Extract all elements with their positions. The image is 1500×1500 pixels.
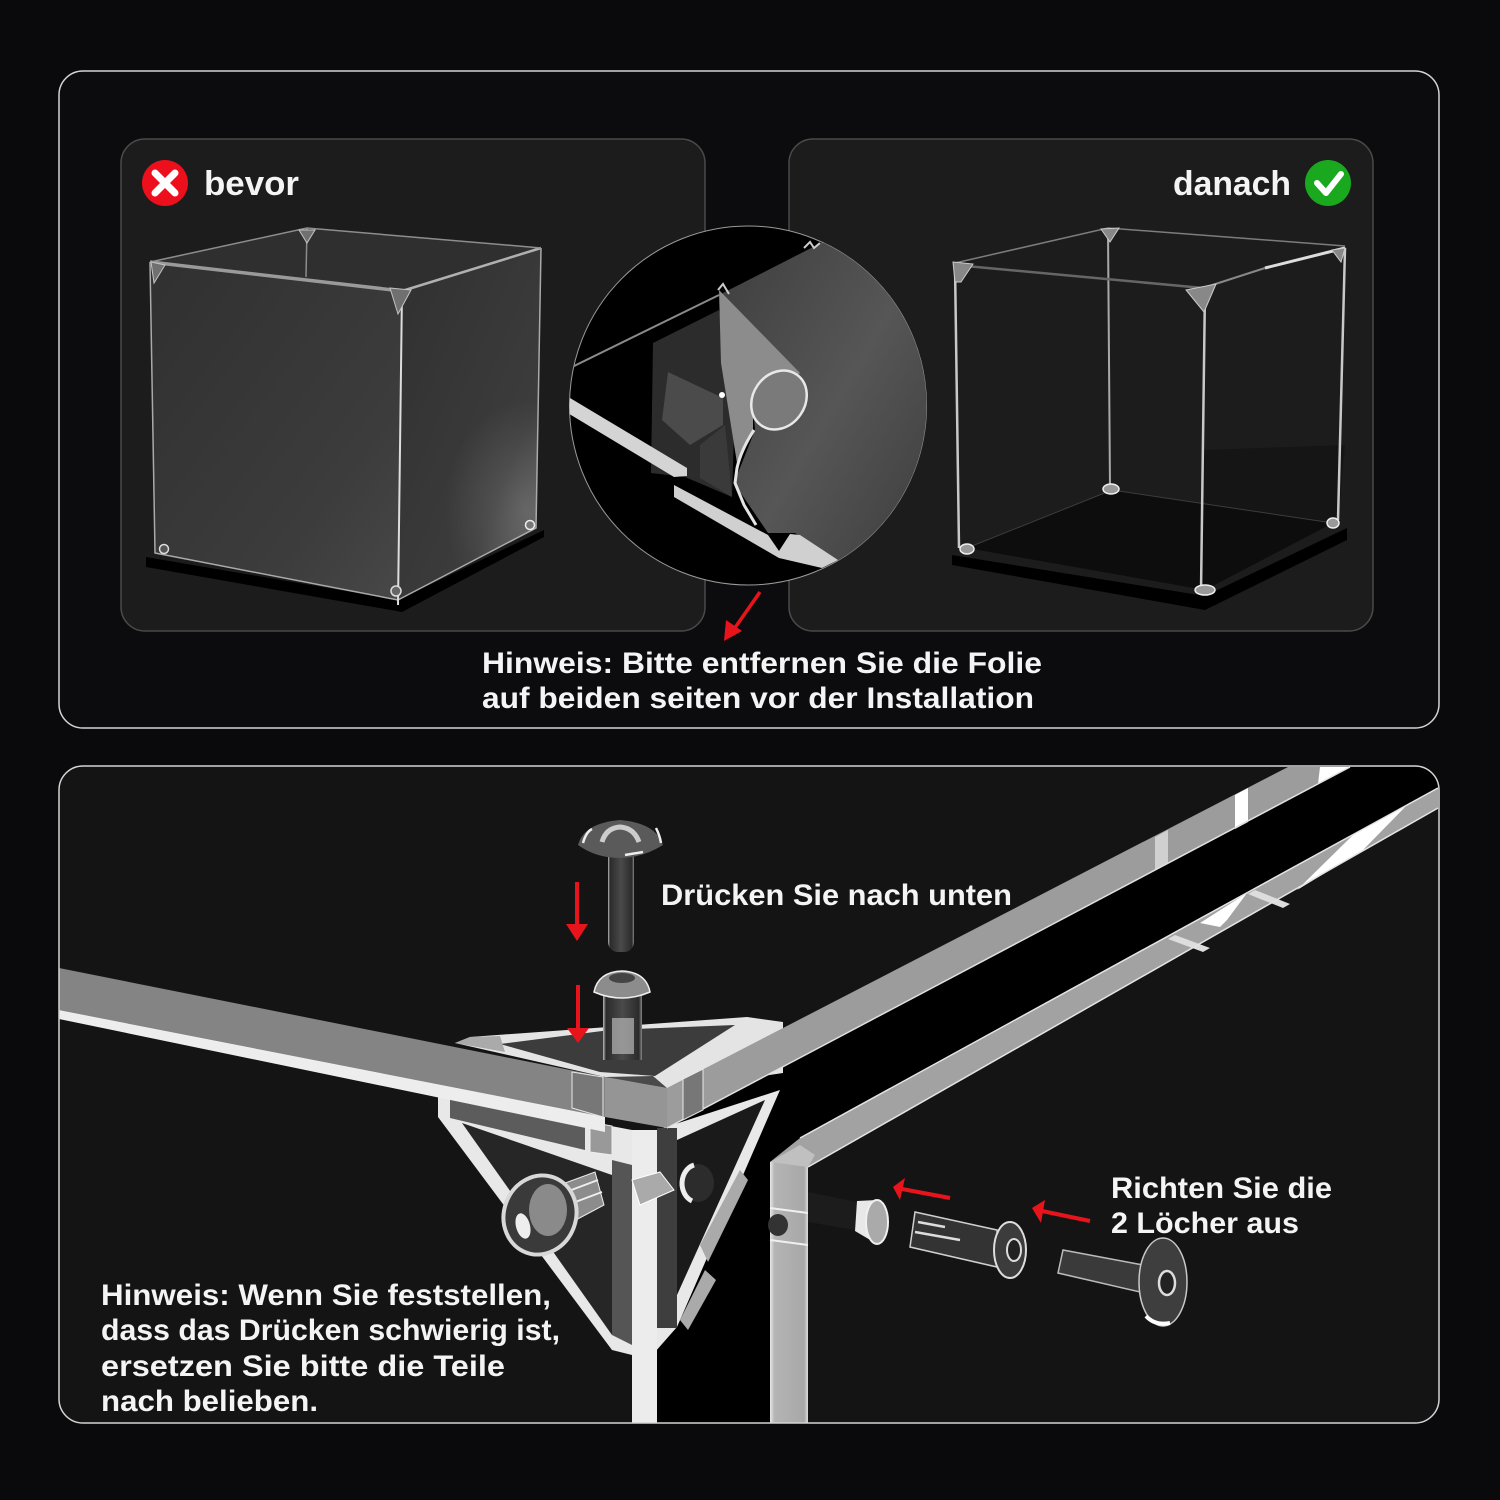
- icon: red cross: [142, 160, 188, 206]
- arrow: press down lower: [567, 985, 589, 1043]
- note: remove film: [482, 647, 1042, 715]
- note: replace parts: dass das Drücken schwierig ist,: [101, 1314, 560, 1347]
- connector details on post: [590, 1122, 674, 1205]
- note: replace parts: nach belieben.: [101, 1385, 318, 1418]
- magnified detail: peeled film: [566, 226, 930, 600]
- screw: small cap: [682, 1164, 714, 1202]
- arrow: align left: [893, 1178, 950, 1200]
- pin: middle: [910, 1212, 1026, 1278]
- screw: right: [1058, 1238, 1187, 1326]
- heading: danach: danach: [1173, 165, 1291, 203]
- pin: pressed into bracket: [594, 971, 650, 1060]
- label: align holes: Richten Sie die: [1111, 1172, 1332, 1205]
- arrow: align right: [1032, 1200, 1090, 1223]
- panel: film removal: [59, 71, 1439, 728]
- illustration: box with film: [146, 227, 544, 612]
- bracket: top plate: [455, 1017, 783, 1090]
- arrow: press down upper: [566, 882, 588, 941]
- panel: before: [121, 139, 705, 631]
- screw: bolt head in bracket: [501, 1171, 605, 1256]
- label: press down: Drücken Sie nach unten: [661, 879, 1012, 912]
- pin: hole stub: [855, 1200, 888, 1244]
- note: remove film: auf beiden seiten vor der Installation: [482, 682, 1034, 715]
- panel: after: [789, 139, 1373, 631]
- beam: right: [667, 767, 1350, 1128]
- illustration: acrylic corner: [59, 767, 1440, 1423]
- heading: bevor: bevor: [204, 165, 299, 203]
- beam: left: [59, 968, 703, 1132]
- note: remove film: Hinweis: Bitte entfernen Sie die Folie: [482, 647, 1042, 680]
- note: replace parts: ersetzen Sie bitte die Teile: [101, 1350, 505, 1383]
- beam: rear right: [768, 788, 1438, 1423]
- screw: upper: [578, 820, 663, 952]
- icon: green check: [1305, 160, 1351, 206]
- panel: assembly: [59, 766, 1440, 1423]
- note: replace parts: [101, 1279, 560, 1418]
- post: white: [632, 1350, 657, 1422]
- illustration: clear box: [952, 228, 1347, 610]
- note: replace parts: Hinweis: Wenn Sie feststellen,: [101, 1279, 551, 1312]
- bracket: lower triangle: [438, 1090, 780, 1355]
- label: align holes: 2 Löcher aus: [1111, 1207, 1299, 1240]
- label: align holes: [1111, 1172, 1332, 1240]
- arrow: to note: [724, 592, 760, 641]
